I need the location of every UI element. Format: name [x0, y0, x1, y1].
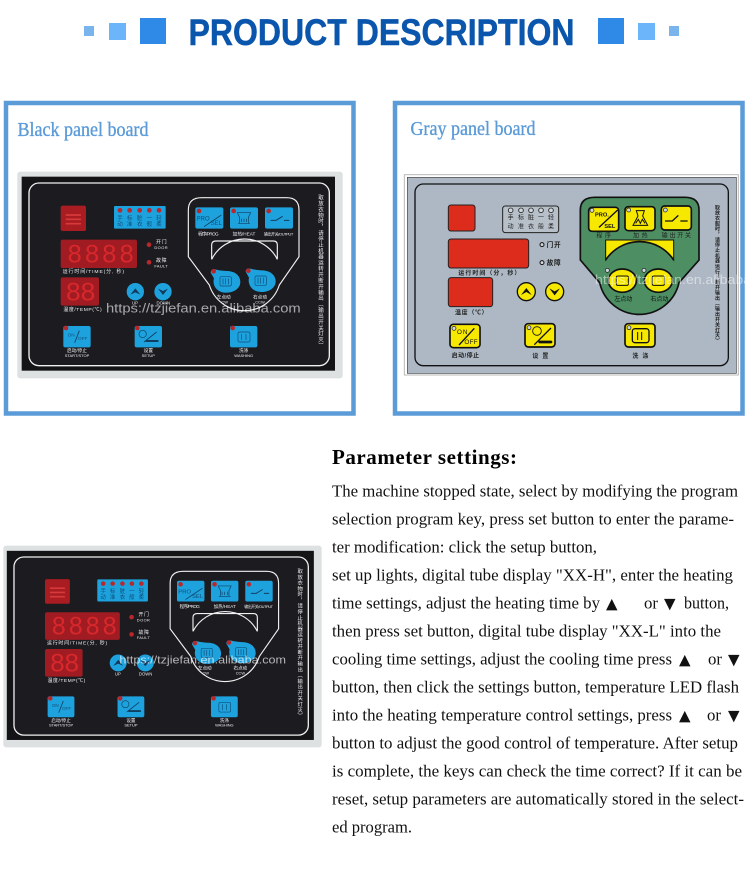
down button	[154, 283, 172, 305]
temperature display	[61, 277, 102, 313]
text block: parameter instructions: button,	[684, 594, 729, 612]
text block: parameter instructions: ▲	[679, 706, 691, 724]
key: program: 程序	[596, 231, 611, 239]
text block: parameter instructions: button, then click the settings button, temperature LED flash	[332, 678, 740, 696]
temperature display	[45, 649, 86, 684]
key: setup: SETUP	[142, 353, 155, 358]
key: setup: 设置	[126, 717, 136, 724]
time display: 运行时间/TIME(分, 秒)	[47, 640, 107, 647]
key: setup: SETUP	[124, 723, 138, 728]
key: counter clockwise jog: 右点动	[234, 664, 248, 671]
time display: 运行时间（分，秒）	[458, 269, 520, 277]
side instruction text: 取放衣物时，请停止机器运转并断开输出（输出开关灯灭）	[296, 568, 303, 719]
key: heat	[625, 207, 655, 239]
mode indicator block: 衣	[528, 223, 534, 231]
door indicator	[147, 239, 168, 250]
time display: 8888	[68, 241, 134, 269]
text block: parameter instructions: or	[707, 706, 722, 724]
program display	[61, 206, 86, 231]
key: clockwise jog	[211, 269, 240, 304]
green control zone	[580, 197, 699, 314]
key: start stop: OFF	[78, 336, 87, 341]
fault indicator	[129, 629, 150, 640]
door indicator	[540, 240, 561, 249]
fault indicator	[540, 258, 561, 267]
mode indicator block	[97, 579, 148, 602]
mode indicator block	[503, 206, 559, 233]
watermark: https://tzjiefan.en.alibaba.com	[106, 301, 301, 316]
mode indicator block: 标	[518, 213, 524, 221]
program display	[45, 579, 70, 604]
text block: parameter instructions	[332, 482, 744, 836]
key: start stop: 启动/停止	[51, 717, 71, 724]
time display: 运行时间/TIME(分, 秒)	[63, 268, 124, 275]
fault indicator: 故障	[138, 629, 149, 636]
text block: parameter instructions: is complete, the keys can check the time correct? If it can be	[332, 762, 742, 780]
time display	[61, 240, 137, 275]
mode indicator block: 动	[117, 221, 123, 228]
decorative squares left	[84, 18, 166, 44]
text block: parameter instructions: The machine stopped state, select by modifying the program	[332, 482, 738, 500]
heading: parameter settings: Parameter settings:	[332, 445, 517, 469]
fault indicator	[147, 257, 168, 268]
key: clockwise jog	[605, 268, 636, 303]
key: setup: 设置	[532, 352, 548, 360]
text block: parameter instructions: set up lights, digital tube display "XX-H", enter the heating	[332, 566, 733, 584]
key: washing	[230, 326, 257, 358]
key: start stop	[450, 324, 480, 360]
mode indicator block: 准	[127, 220, 133, 228]
header: product description	[84, 12, 679, 53]
door indicator: DOOR	[154, 245, 168, 250]
text block: parameter instructions: ter modification: click the setup button,	[332, 538, 597, 556]
mode indicator block: 准	[518, 223, 524, 231]
text block: parameter instructions: or	[708, 650, 723, 668]
key: heat: 加热	[633, 231, 648, 239]
decorative squares right	[598, 18, 679, 44]
mode indicator block: 动	[508, 224, 514, 231]
key: counter clockwise jog	[226, 640, 256, 675]
key: heat	[211, 581, 238, 610]
key: clockwise jog: CW	[202, 670, 209, 675]
key: start stop: START/STOP	[65, 353, 90, 358]
key: start stop	[63, 326, 91, 358]
mode indicator block: 标	[127, 214, 133, 222]
temperature display: 温度（℃）	[455, 308, 488, 316]
down button	[137, 654, 154, 676]
mode indicator block: 准	[110, 593, 116, 601]
mode indicator block: 手	[508, 213, 514, 221]
heading: gray panel board: Gray panel board	[410, 118, 536, 140]
key: setup: 设置	[144, 347, 153, 354]
key: output: 输出开关/OUTPUT	[264, 230, 294, 236]
fault indicator: 故障	[156, 257, 167, 264]
door indicator	[129, 611, 150, 622]
program display	[448, 205, 475, 231]
text block: parameter instructions: ▼	[728, 650, 740, 668]
mode indicator block: 一	[147, 216, 153, 222]
key: heat	[230, 207, 258, 237]
key: program: SEL	[604, 224, 616, 230]
text block: parameter instructions: button to adjust the good control of temperature. After setup	[332, 734, 738, 752]
key: counter clockwise jog: CCW	[255, 299, 265, 304]
mode indicator block: 动	[100, 594, 106, 601]
up button	[110, 654, 127, 676]
door indicator: DOOR	[137, 617, 150, 622]
mode indicator block: 一	[129, 589, 135, 595]
key: washing: 洗涤	[239, 347, 249, 354]
temperature display: 温度/TEMP(℃)	[48, 677, 86, 684]
text block: parameter instructions: then press set button, digital tube display "XX-L" into the	[332, 622, 721, 640]
temperature display	[448, 278, 493, 316]
mode indicator block: 轻	[139, 587, 145, 595]
key: clockwise jog: 左点动	[198, 664, 212, 671]
door indicator: 门开	[547, 240, 561, 249]
key: program: SEL	[211, 221, 223, 227]
side instruction text: 取放衣物时，请停止机器运转并断开输出（输出开关灯灭）	[317, 194, 324, 349]
mode indicator block: 脏	[120, 587, 126, 595]
key: setup	[525, 324, 555, 360]
up button: UP	[132, 300, 138, 305]
temperature display: 温度/TEMP(℃)	[63, 306, 102, 313]
mode indicator block: 脏	[528, 213, 534, 221]
mode indicator block: 手	[100, 587, 106, 595]
mode indicator block: 衣	[137, 220, 143, 228]
mode indicator block: 柔	[139, 593, 145, 601]
mode indicator block: 般	[129, 593, 135, 601]
key: program: PRO.	[595, 213, 609, 219]
key: counter clockwise jog	[246, 268, 276, 304]
key: washing: WASHING	[215, 723, 234, 728]
text block: parameter instructions: ▼	[728, 706, 740, 724]
key: washing: 洗涤	[220, 717, 229, 724]
key: program: PRO	[178, 589, 191, 595]
control outline	[188, 198, 299, 311]
time display	[448, 239, 529, 277]
key: start stop: START/STOP	[49, 723, 73, 728]
key: clockwise jog: 左点动	[217, 293, 231, 300]
key: start stop: OFF	[464, 339, 478, 346]
watermark: https://tzjiefan.en.alibaba.com	[119, 654, 286, 666]
mode indicator block: 柔	[156, 220, 162, 228]
mode indicator block	[114, 206, 166, 229]
temperature display: 88	[66, 278, 95, 306]
mode indicator block: 轻	[156, 214, 162, 222]
key: program: 程序/PROG	[180, 603, 200, 610]
key: start stop: 启动/停止	[67, 347, 87, 354]
fault indicator: FAULT	[137, 635, 150, 640]
up button: UP	[115, 671, 121, 676]
text block: parameter instructions: or	[644, 594, 659, 612]
down button: DOWN	[139, 671, 152, 676]
title: PRODUCT DESCRIPTION	[188, 12, 574, 53]
mode indicator block: 轻	[548, 213, 554, 221]
key: output	[661, 206, 691, 240]
key: clockwise jog	[192, 641, 221, 675]
key: setup	[135, 326, 162, 358]
key: program: PRO	[197, 216, 210, 222]
key: clockwise jog: 左点动	[614, 295, 632, 303]
door indicator: 开门	[138, 611, 149, 618]
key: heat: 加热/HEAT	[233, 230, 255, 237]
down button	[546, 283, 564, 301]
side instruction text: 取放衣服时，请停止机器运行！断开输出（输出开关灯灭）	[714, 205, 720, 343]
control board photo: parameter settings	[3, 546, 322, 747]
text block: parameter instructions: selection program key, press set button to enter the parame-	[332, 510, 734, 528]
key: counter clockwise jog	[642, 268, 672, 303]
mode indicator block: 标	[110, 587, 116, 595]
key: counter clockwise jog: 右点动	[650, 295, 668, 303]
text block: parameter instructions: ▼	[664, 594, 676, 612]
key: program	[589, 207, 619, 239]
key: start stop: ON	[52, 703, 59, 708]
up button	[517, 283, 535, 301]
key: start stop	[48, 696, 74, 728]
fault indicator: 故障	[547, 258, 561, 267]
key: washing: WASHING	[234, 353, 253, 358]
control board photo: black panel	[17, 172, 343, 378]
key: program	[195, 207, 223, 237]
key: start stop: ON	[68, 333, 75, 338]
yellow trapezoid	[606, 240, 674, 260]
text block: parameter instructions: ▲	[679, 650, 691, 668]
mode indicator block: 一	[538, 215, 544, 221]
key: program: 程序/PROG	[198, 230, 219, 237]
key: washing	[211, 696, 238, 728]
text block: parameter instructions: cooling time settings, adjust the cooling time press	[332, 650, 672, 668]
text block: parameter instructions: time settings, adjust the heating time by	[332, 594, 601, 612]
key: start stop: 启动/停止	[452, 352, 479, 360]
panel: gray panel board frame	[395, 103, 742, 414]
time display: 8888	[52, 614, 117, 641]
mode indicator block: 般	[147, 220, 153, 228]
key: output: 输出开关	[662, 232, 691, 240]
fault indicator: FAULT	[154, 263, 168, 268]
mode indicator block: 脏	[137, 214, 143, 222]
control board drawing: gray panel	[404, 175, 750, 375]
door indicator: 开门	[156, 239, 167, 246]
mode indicator block: 般	[538, 223, 544, 231]
key: start stop: ON	[457, 329, 468, 336]
temperature display: 88	[50, 650, 79, 677]
key: output	[264, 207, 294, 236]
key: output: 输出开关/OUTPUT	[244, 604, 274, 609]
mode indicator block: 柔	[548, 223, 554, 231]
up button	[127, 283, 144, 305]
mode indicator block: 衣	[120, 593, 126, 601]
key: heat: 加热/HEAT	[214, 603, 236, 610]
text block: parameter instructions: reset, setup parameters are automatically stored in the select-	[332, 790, 744, 808]
time display	[45, 612, 120, 647]
down button: DOWN	[156, 300, 170, 305]
text block: parameter instructions: ▲	[606, 594, 618, 612]
key: output	[244, 581, 274, 609]
text block: parameter instructions: into the heating temperature control settings, press	[332, 706, 672, 724]
key: washing	[625, 324, 655, 360]
key: start stop: OFF	[62, 706, 71, 711]
heading: black panel board: Black panel board	[18, 119, 148, 141]
text block: parameter instructions: ed program.	[332, 818, 412, 836]
key: washing: 洗涤	[632, 352, 648, 360]
key: clockwise jog: CW	[221, 299, 228, 304]
control outline	[170, 571, 279, 682]
key: setup	[118, 696, 144, 728]
key: program: SEL	[192, 594, 204, 600]
dial arc	[606, 242, 674, 260]
key: counter clockwise jog: 右点动	[253, 293, 267, 300]
key: program	[177, 581, 204, 610]
panel: black panel board frame	[6, 103, 354, 414]
key: counter clockwise jog: CCW	[236, 670, 245, 675]
mode indicator block: 手	[117, 214, 123, 222]
